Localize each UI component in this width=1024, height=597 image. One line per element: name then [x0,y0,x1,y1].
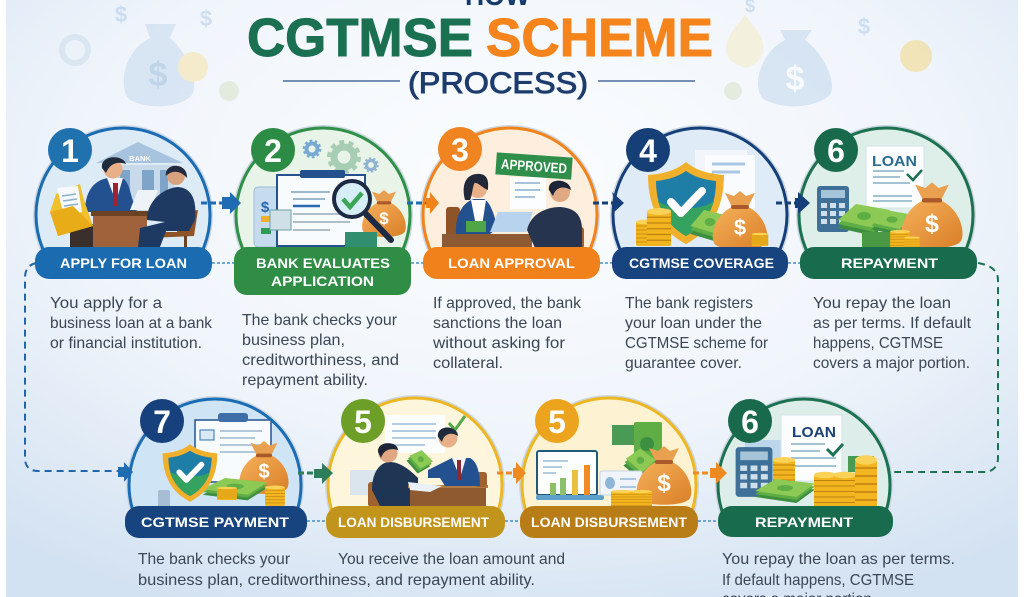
label pill: APPLICATION [271,273,374,289]
panel: step 2 bank evaluates application [230,120,420,389]
label pill: LOAN APPROVAL [448,255,575,271]
description: The bank registers [625,295,753,312]
arrow: step 4 to 5 [776,192,810,214]
icon: left faint money bag [124,24,194,106]
description [242,312,399,389]
description: If approved, the bank [433,295,582,312]
description: guarantee cover. [625,355,742,372]
illustration: laptop and funds [524,400,694,508]
description: collateral. [433,355,503,372]
panel: step 6 repayment lower [715,395,955,597]
arrow: step 5 to 5 [497,462,526,484]
label pill [234,247,411,295]
illustration: loan and coins: LOAN [792,424,836,441]
illustration: document review: $ [261,199,270,216]
number badge 6 lower [728,399,772,443]
number badge 4: 4 [639,133,657,169]
panel: step 5 loan disbursement funds [519,395,699,538]
description: The bank checks your [138,551,291,568]
decorative money background [62,0,932,106]
illustration: document review: $ [379,209,389,228]
ring [520,396,698,510]
number badge 3 [438,127,482,171]
icon: left faint money bag: $ [149,56,168,94]
description [722,551,955,597]
label pill: LOAN DISBURSEMENT [338,514,489,530]
illustration: guarantee payment: $ [258,461,270,483]
description [813,295,972,372]
label pill [612,247,788,279]
number badge 2: 2 [264,133,282,169]
number badge 3: 3 [451,132,469,168]
panel: step 6 repayment [795,120,985,372]
description [432,295,582,372]
number badge 6 [814,128,858,172]
number badge 6: 6 [827,133,845,169]
description: business plan, creditworthiness, and repayment ability. [138,572,535,589]
panel: step 4 CGTMSE coverage [610,120,800,372]
description: without asking for [432,335,566,352]
illustration: loan repayment: $ [925,210,939,238]
panel: step 1 apply for loan [30,120,220,352]
route connector: right dashed return path [892,263,998,472]
number badge 7 [140,399,184,443]
number badge 6 lower: 6 [741,404,759,440]
icon: right faint money bags: $ [786,60,805,98]
title [247,0,713,100]
ring [422,126,598,250]
label pill [718,506,893,537]
ring [612,126,788,250]
description: sanctions the loan [433,315,562,332]
description: your loan under the [625,315,762,332]
label pill: BANK EVALUATES [256,255,390,271]
arrow: step 7 to 5 [298,463,333,484]
label pill [35,247,212,279]
description: covers a major portion. [813,355,970,372]
number badge 1: 1 [61,133,79,169]
number badge 1 [48,128,92,172]
panel: step 3 loan approval [420,120,610,372]
ring [234,126,412,249]
label pill [326,506,505,538]
description: business plan, [242,332,345,349]
label pill [423,247,600,279]
number badge 5 amber [535,399,579,443]
description [625,295,769,372]
number badge 7: 7 [153,404,171,440]
arrow: step 5 to 6 [693,462,727,484]
panel: step 7 CGTMSE payment [125,395,535,589]
ring [34,126,212,250]
subtitle: process: (PROCESS) [408,67,588,100]
description: CGTMSE scheme for [625,335,769,352]
illustration: approval meeting [424,130,596,248]
arrow: step 2 to 3 [407,192,439,214]
icon: left faint coins: $ [115,2,127,27]
icon: right faint money bags: $ [858,14,870,39]
illustration: guarantee shield [614,130,786,248]
number badge 4 [626,128,670,172]
label pill: CGTMSE PAYMENT [141,514,290,530]
label pill: LOAN DISBURSEMENT [531,514,687,530]
illustration: cash handover [330,400,500,508]
arrow: step 3 to 4 [593,192,624,214]
illustration: guarantee shield: $ [734,215,746,240]
description [50,295,213,352]
description: repayment ability. [242,372,368,389]
description: The bank checks your [242,312,398,329]
illustration: document review [238,130,408,248]
route connector: left dashed return path [25,263,118,471]
label pill: REPAYMENT [841,255,939,271]
label pill: REPAYMENT [755,514,854,530]
title: CGTMSE: CGTMSE [247,8,473,68]
number badge 5 green: 5 [354,404,372,440]
illustration: bank meeting [38,130,208,248]
illustration: bank meeting: BANK [129,154,151,163]
description: If default happens, CGTMSE [722,572,914,589]
icon: right faint coins [724,40,932,100]
label pill [520,506,698,538]
icon: left faint coins [62,2,239,101]
illustration: loan repayment: LOAN [872,153,917,170]
description: creditworthiness, and [242,352,399,369]
description: You repay the loan [813,295,951,312]
illustration: laptop and funds: $ [657,470,671,497]
title: SCHEME: SCHEME [486,8,713,68]
label pill [800,247,977,279]
ring [326,396,504,510]
label pill: APPLY FOR LOAN [60,255,187,271]
icon: left faint coins: $ [200,6,212,31]
connectors between labels [212,263,800,521]
icon: right faint money bags [726,0,870,106]
description: or financial institution. [50,335,202,352]
number badge 5 green [341,399,385,443]
description: as per terms. If default [813,315,972,332]
description: business loan at a bank [50,315,213,332]
description: happens, CGTMSE [813,335,943,352]
panel: step 5 loan disbursement meeting [325,395,565,575]
arrow: step 1 to 2 [201,192,241,214]
illustration: loan repayment [800,130,972,248]
description [138,551,535,589]
description: You apply for a [50,295,162,312]
ring [716,398,892,512]
number badge 2 [251,128,295,172]
description: You receive the loan amount and [338,551,565,568]
ring [798,126,974,250]
ring [128,398,302,509]
label pill: CGTMSE COVERAGE [629,255,774,271]
number badge 5 amber: 5 [548,404,566,440]
description: You repay the loan as per terms. [722,551,955,568]
illustration: loan and coins [720,400,888,509]
illustration: approval meeting: APPROVED [501,156,567,176]
illustration: guarantee payment [130,400,300,507]
label pill [125,506,307,538]
arrow: return path into step 7 [118,462,133,482]
